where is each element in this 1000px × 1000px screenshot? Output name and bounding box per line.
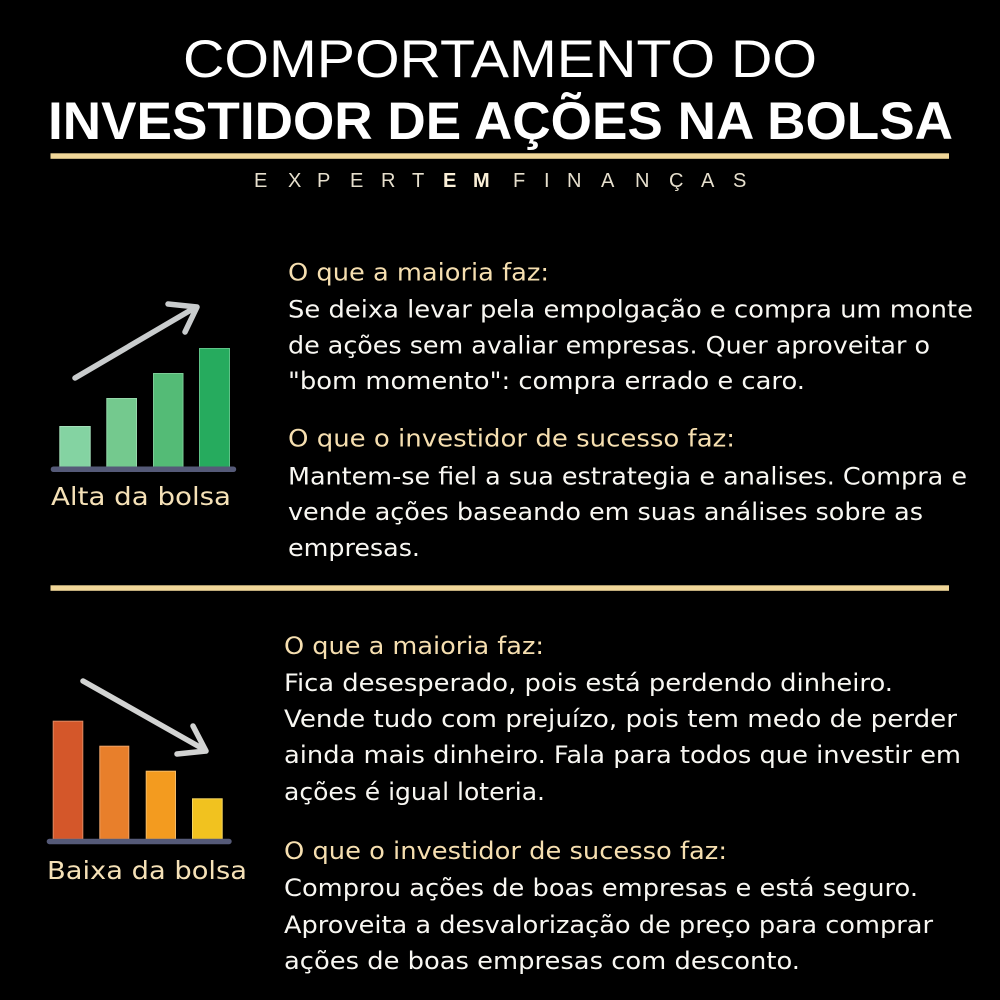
text: what most people do, falling market <box>284 632 961 806</box>
title line 2: INVESTIDOR DE AÇÕES NA BOLSA <box>48 91 953 151</box>
heading: O que o investidor de sucesso faz: <box>288 424 735 452</box>
subtitle: Expert em Finanças: EXPERT EM FINANÇAS <box>254 170 746 192</box>
arrow up <box>75 304 197 378</box>
header <box>48 30 953 192</box>
body: Fica desesperado, pois está perdendo dinheiro. <box>284 669 893 697</box>
title line 1: COMPORTAMENTO DO <box>183 30 817 89</box>
body: Mantem-se fiel a sua estrategia e analises. Compra e <box>288 462 967 490</box>
body <box>288 296 973 395</box>
icon: rising bar chart <box>51 304 236 472</box>
bar 2 <box>100 746 129 839</box>
body: empresas. <box>288 534 420 562</box>
title underline <box>50 153 949 159</box>
panel: alta da bolsa <box>51 258 973 562</box>
body: ainda mais dinheiro. Fala para todos que investir em <box>284 741 961 769</box>
body: "bom momento": compra errado e caro. <box>288 367 805 395</box>
bar 3 <box>146 771 176 839</box>
body: ações é igual loteria. <box>284 778 545 806</box>
body <box>288 462 967 562</box>
body: Se deixa levar pela empolgação e compra um monte <box>288 296 973 324</box>
body: ações de boas empresas com desconto. <box>284 947 800 975</box>
bar 4 <box>192 799 222 839</box>
heading: O que a maioria faz: <box>284 632 544 660</box>
text: what successful investors do, falling market <box>284 837 933 975</box>
bar 1 <box>60 426 90 468</box>
body: Comprou ações de boas empresas e está seguro. <box>284 874 918 902</box>
bar 4 <box>200 348 230 468</box>
chart baseline <box>47 839 232 844</box>
panel: baixa da bolsa <box>47 632 961 975</box>
label: Baixa da bolsa: Baixa da bolsa <box>47 856 247 885</box>
label: Alta da bolsa: Alta da bolsa <box>51 482 231 511</box>
arrow down <box>83 681 206 754</box>
text: what successful investors do, rising market <box>288 424 967 562</box>
icon: falling bar chart <box>47 681 232 844</box>
bar 2 <box>107 398 136 468</box>
body: vende ações baseando em suas análises sobre as <box>288 498 923 526</box>
bar 1 <box>53 721 83 839</box>
body: Vende tudo com prejuízo, pois tem medo de perder <box>284 705 957 733</box>
chart baseline <box>51 466 236 472</box>
body: de ações sem avaliar empresas. Quer aproveitar o <box>288 332 930 360</box>
heading: O que o investidor de sucesso faz: <box>284 837 727 865</box>
body <box>284 669 961 806</box>
body <box>284 874 933 975</box>
bar 3 <box>154 374 183 468</box>
heading: O que a maioria faz: <box>288 258 549 286</box>
text: what most people do, rising market <box>288 258 973 395</box>
section divider <box>50 585 949 591</box>
body: Aproveita a desvalorização de preço para comprar <box>284 911 933 939</box>
